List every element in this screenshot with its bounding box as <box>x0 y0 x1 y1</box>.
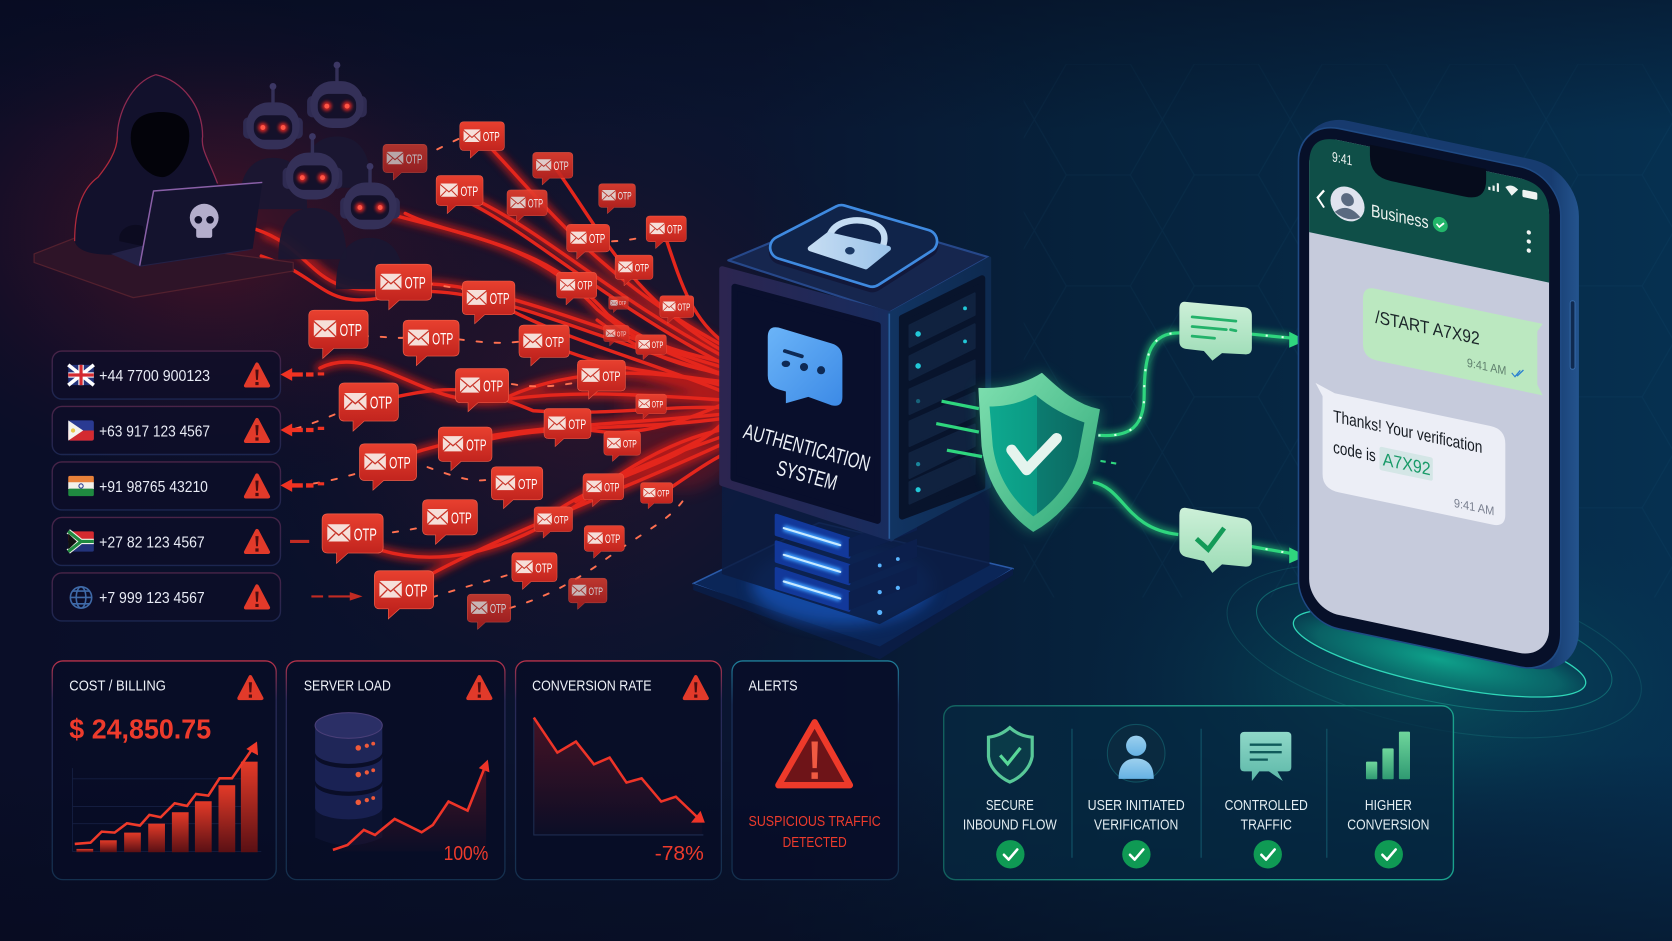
panel: cost / billing <box>52 661 276 880</box>
flag: South Africa <box>68 531 94 552</box>
avatar <box>1330 183 1365 225</box>
OTP bubble: OTP <box>405 275 426 293</box>
icon: skull <box>190 204 219 238</box>
notch <box>1370 145 1486 201</box>
item: user initiated verification <box>1088 724 1185 868</box>
green connectors through the shield <box>936 332 1306 563</box>
OTP bubble <box>460 122 504 158</box>
OTP bubble <box>533 152 573 185</box>
OTP bubble <box>636 335 666 360</box>
OTP bubble: OTP <box>618 191 632 203</box>
amount: $ 24,850.75 <box>69 713 211 744</box>
icon: chat bubble <box>768 327 842 406</box>
icon: bars <box>1366 732 1410 779</box>
warning icon <box>685 677 707 698</box>
received message bubble: Thanks! Your verification <box>1333 406 1482 457</box>
OTP bubble: OTP <box>460 184 478 199</box>
OTP bubble <box>577 360 625 399</box>
OTP bubble: OTP <box>617 329 626 338</box>
sent message bubble: 9:41 AM <box>1467 356 1506 378</box>
flag: India <box>68 476 94 496</box>
item: secure inbound flow: INBOUND FLOW <box>963 818 1057 834</box>
OTP bubble: OTP <box>483 379 503 396</box>
lid with lock <box>782 217 926 280</box>
OTP bubble <box>376 264 432 310</box>
alert message: DETECTED <box>783 834 847 851</box>
OTP bubble: OTP <box>354 524 377 544</box>
OTP bubble <box>584 526 624 558</box>
OTP bubble: OTP <box>535 560 552 575</box>
row: UK number <box>52 351 280 399</box>
OTP bubble: OTP <box>545 335 564 351</box>
falling line chart <box>534 718 705 835</box>
icon: padlock <box>810 220 888 267</box>
item: higher conversion: HIGHER <box>1365 798 1412 814</box>
OTP bubble <box>599 184 635 214</box>
OTP bubble <box>467 594 511 629</box>
base platform <box>693 523 1013 659</box>
verified badge <box>1433 215 1448 234</box>
OTP bubble <box>609 297 628 313</box>
warning icon <box>239 677 262 698</box>
large warning icon <box>778 722 850 785</box>
value: 100% <box>444 843 488 865</box>
received message bubble <box>1316 383 1505 527</box>
icon: globe <box>70 587 92 608</box>
icon: user <box>1107 724 1165 782</box>
glowing blue bars <box>776 512 917 615</box>
OTP bubble: OTP <box>635 263 649 275</box>
item: higher conversion: CONVERSION <box>1347 818 1429 834</box>
flag: Philippines <box>68 420 94 441</box>
OTP bubble: OTP <box>389 454 411 473</box>
hooded figure <box>75 75 218 255</box>
icon: chat <box>1240 732 1291 781</box>
OTP bubble <box>512 553 557 589</box>
OTP bubble <box>423 500 477 544</box>
OTP bubble: OTP <box>657 488 669 499</box>
item: user initiated verification: VERIFICATION <box>1094 818 1178 834</box>
rising bar chart <box>73 741 261 852</box>
robots <box>239 62 404 289</box>
OTP bubble: OTP <box>340 320 362 340</box>
OTP bubble <box>462 281 515 324</box>
OTP bubble: OTP <box>554 160 569 173</box>
OTP bubble: OTP <box>577 280 593 293</box>
sent message bubble: /START A7X92 <box>1375 306 1480 349</box>
label: authentication system <box>741 419 873 495</box>
OTP bubble: OTP <box>602 368 620 384</box>
side button <box>1570 301 1575 369</box>
item: secure inbound flow: SECURE <box>986 798 1034 814</box>
warning icon <box>468 677 491 698</box>
OTP bubble: OTP <box>451 510 472 528</box>
flag: UK <box>68 365 94 385</box>
OTP bubble: OTP <box>406 151 422 166</box>
OTP bubble <box>615 255 653 286</box>
label: authentication system: AUTHENTICATION <box>741 419 873 476</box>
heading: COST / BILLING <box>69 678 166 694</box>
desk <box>34 235 293 298</box>
panel: server load <box>286 661 505 880</box>
heading: SERVER LOAD <box>304 678 391 694</box>
OTP bubble <box>438 427 492 471</box>
business name: Business <box>1371 201 1429 232</box>
OTP bubble: OTP <box>483 129 500 144</box>
row: Philippines number <box>52 406 280 454</box>
row: UK number: +44 7700 900123 <box>99 368 210 385</box>
panel: benefits <box>944 706 1453 880</box>
status icons <box>1488 181 1537 201</box>
OTP bubble <box>491 467 543 509</box>
authentication server tower <box>693 213 1013 659</box>
heading: ALERTS <box>749 678 798 694</box>
OTP bubble: OTP <box>667 223 682 236</box>
OTP bubble: OTP <box>677 302 690 313</box>
status bar time: 9:41 <box>1332 148 1352 168</box>
OTP bubble <box>660 296 694 323</box>
chat header <box>1309 134 1549 283</box>
OTP bubble <box>339 383 398 431</box>
OTP bubble: OTP <box>619 301 626 307</box>
database stack <box>315 713 382 846</box>
OTP bubble: OTP <box>518 476 537 493</box>
shield with check <box>979 373 1099 531</box>
label: authentication system: SYSTEM <box>774 456 840 495</box>
alert message: SUSPICIOUS TRAFFIC <box>749 813 881 830</box>
OTP bubble: OTP <box>652 399 663 409</box>
smartphone <box>1298 111 1579 678</box>
OTP bubble: OTP <box>568 417 586 432</box>
laptop with skull <box>111 182 262 267</box>
phone front <box>1298 120 1561 676</box>
OTP bubble: OTP <box>605 533 620 546</box>
box body <box>722 213 990 539</box>
phone number list <box>52 351 363 621</box>
item: user initiated verification: USER INITIATED <box>1088 798 1185 814</box>
OTP bubble <box>646 216 686 249</box>
phone body <box>1302 111 1579 678</box>
phone platform rings <box>1212 532 1657 770</box>
OTP bubble <box>436 175 483 214</box>
OTP bubble: OTP <box>466 437 486 454</box>
row: unknown number <box>52 573 280 621</box>
row: India number <box>52 462 280 510</box>
OTP bubble <box>604 325 629 346</box>
heading: CONVERSION RATE <box>532 678 652 694</box>
OTP bubble <box>604 432 641 461</box>
received message bubble: 9:41 AM <box>1454 496 1494 518</box>
received message bubble: A7X92 <box>1383 448 1431 479</box>
OTP bubble: OTP <box>432 330 453 348</box>
hacker at laptop with desk <box>34 62 404 298</box>
OTP message bubbles <box>309 122 694 629</box>
OTP bubble <box>534 507 573 538</box>
OTP bubble <box>544 409 591 447</box>
rack slots <box>902 278 982 516</box>
value: -78% <box>655 843 704 865</box>
OTP bubble: OTP <box>490 291 509 308</box>
OTP bubble <box>359 444 417 490</box>
OTP bubble <box>557 272 597 305</box>
item: controlled traffic <box>1225 732 1308 868</box>
OTP bubble <box>456 369 509 412</box>
green message card: text <box>1179 302 1252 361</box>
OTP bubble: OTP <box>589 232 605 246</box>
OTP bubble <box>569 578 607 609</box>
received message bubble: code is <box>1333 437 1376 466</box>
OTP bubble: OTP <box>554 515 569 527</box>
OTP bubble: OTP <box>405 580 428 601</box>
back chevron <box>1318 189 1324 208</box>
row: India number: +91 98765 43210 <box>99 479 208 496</box>
OTP bubble <box>641 483 673 509</box>
row: South Africa number: +27 82 123 4567 <box>99 534 205 551</box>
OTP bubble <box>322 514 383 563</box>
arrows into rows <box>280 368 363 601</box>
green message card: check <box>1179 508 1252 573</box>
OTP bubble <box>403 320 459 366</box>
load line chart <box>333 760 489 851</box>
item: controlled traffic: TRAFFIC <box>1241 818 1292 834</box>
menu dots <box>1527 230 1531 253</box>
panel: alerts <box>732 661 898 880</box>
row: South Africa number <box>52 517 280 565</box>
panel: conversion rate <box>516 661 721 880</box>
screen wallpaper <box>1309 134 1549 659</box>
OTP bubble <box>636 394 666 419</box>
row: Philippines number: +63 917 123 4567 <box>99 423 210 440</box>
OTP bubble: OTP <box>623 439 637 451</box>
OTP bubble: OTP <box>490 601 506 616</box>
OTP bubble <box>309 310 368 358</box>
OTP bubble <box>519 325 569 366</box>
OTP bubble: OTP <box>528 197 543 210</box>
OTP bubble <box>507 190 547 223</box>
sent message bubble <box>1363 286 1543 395</box>
OTP bubble: OTP <box>370 393 392 413</box>
item: secure inbound flow <box>963 728 1057 868</box>
lower column <box>722 480 990 624</box>
OTP bubble: OTP <box>588 586 603 598</box>
icon: shield <box>988 728 1032 782</box>
item: controlled traffic: CONTROLLED <box>1225 798 1308 814</box>
alert message <box>749 813 881 851</box>
OTP bubble <box>383 144 427 180</box>
OTP bubble: OTP <box>652 340 663 350</box>
OTP bubble: OTP <box>604 480 619 494</box>
row: unknown number: +7 999 123 4567 <box>99 590 205 607</box>
OTP bubble <box>567 224 610 259</box>
OTP bubble <box>583 474 624 507</box>
item: higher conversion <box>1347 732 1429 868</box>
OTP bubble <box>374 571 434 619</box>
red OTP traffic streams <box>256 137 746 608</box>
